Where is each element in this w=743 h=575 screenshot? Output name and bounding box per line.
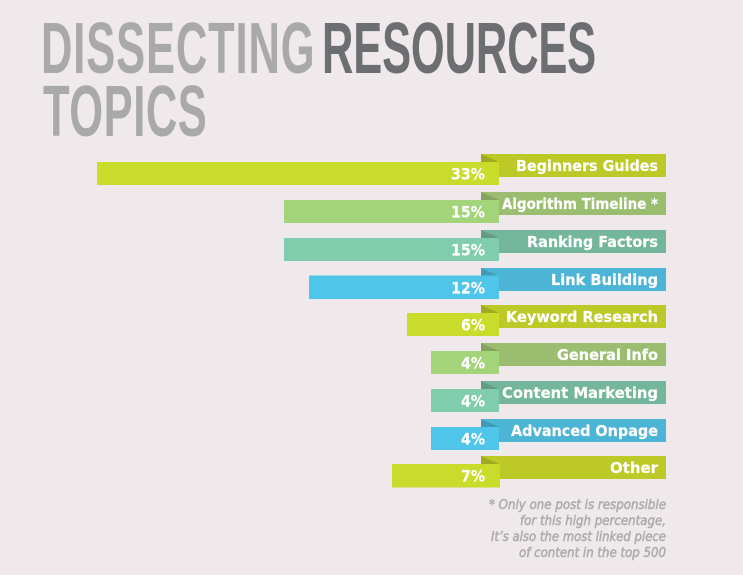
bar: Algorithm Timeline 15% — [284, 192, 666, 223]
footnote: of content in the top 500 — [519, 545, 666, 561]
bar: Other 7%: 7% — [461, 466, 485, 486]
bar: Link Building 12%: Link Building — [551, 271, 658, 289]
bar: Content Marketing 4%: Content Marketing — [502, 384, 658, 402]
bar: Link Building 12% — [309, 268, 666, 299]
bar: Algorithm Timeline 15%: 15% — [451, 202, 485, 222]
bar: Advanced Onpage 4%: Advanced Onpage — [511, 422, 658, 440]
bar: Ranking Factors 15% — [284, 230, 666, 261]
bar: Other 7% — [392, 456, 666, 488]
footnote: It’s also the most linked piece — [491, 529, 666, 545]
title: TOPICS — [43, 71, 207, 152]
bar: Keyword Research 6% — [407, 305, 666, 336]
bar: Keyword Research 6%: Keyword Research — [506, 308, 658, 326]
bar: Advanced Onpage 4% — [431, 419, 666, 450]
title: RESOURCES — [322, 8, 596, 89]
bar: Content Marketing 4%: 4% — [461, 392, 485, 410]
bar: General Info 4%: 4% — [461, 354, 485, 372]
bar: Content Marketing 4% — [431, 381, 666, 412]
bar: General Info 4% — [431, 343, 666, 374]
bar: Beginners Guides 33%: Beginners Guides — [516, 157, 658, 175]
bar: Advanced Onpage 4%: 4% — [461, 430, 485, 448]
footnote: * Only one post is responsible — [489, 497, 666, 513]
title: DISSECTING — [41, 8, 315, 89]
title — [41, 8, 596, 152]
bar: Keyword Research 6%: 6% — [461, 316, 485, 334]
bar: Algorithm Timeline 15%: Algorithm Timeline * — [502, 195, 658, 213]
bar: General Info 4%: General Info — [557, 346, 658, 364]
bar: Beginners Guides 33% — [97, 154, 666, 185]
bar: Other 7%: Other — [610, 459, 658, 477]
bar: Ranking Factors 15%: Ranking Factors — [527, 233, 658, 251]
bar: Beginners Guides 33%: 33% — [451, 164, 485, 184]
bar: Ranking Factors 15%: 15% — [451, 240, 485, 260]
footnote — [489, 497, 666, 561]
bar: Link Building 12%: 12% — [451, 278, 485, 298]
footnote: for this high percentage, — [520, 513, 666, 529]
